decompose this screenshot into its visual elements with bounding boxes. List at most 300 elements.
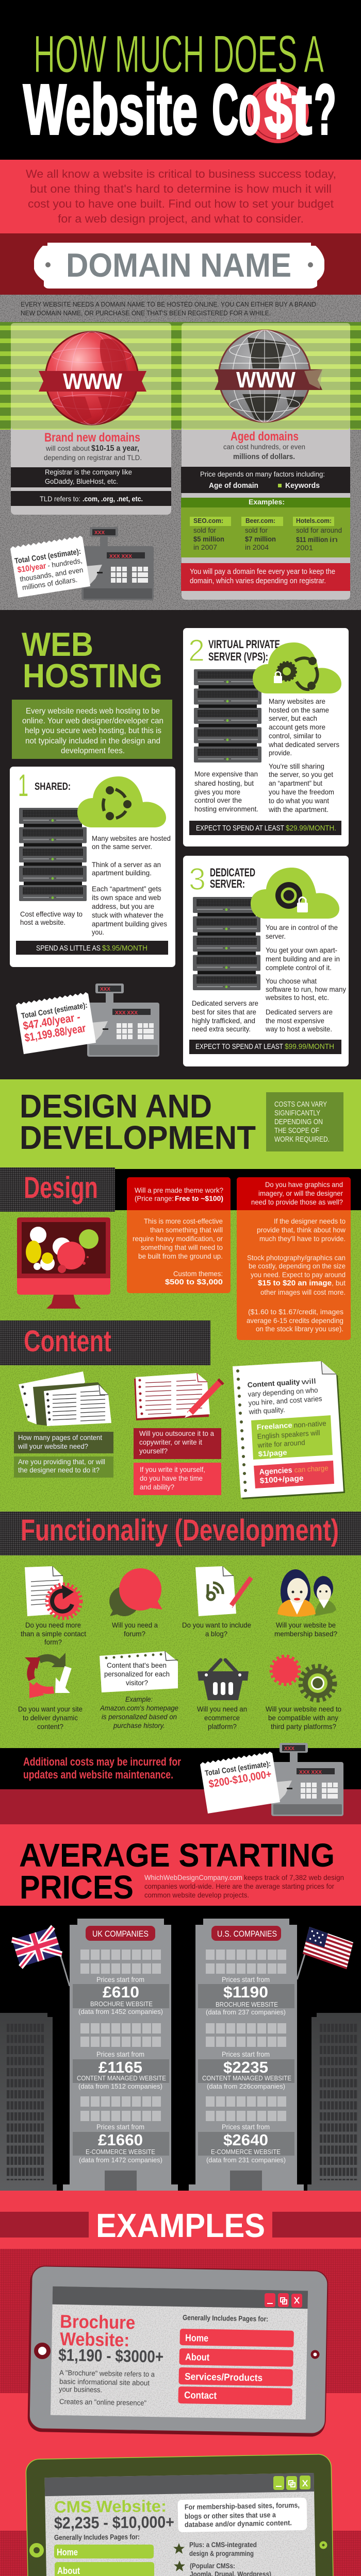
question: blog (182, 1621, 251, 1638)
dedicated description: way to host a website. (265, 1025, 332, 1033)
prices intro text: WhichWebDesignCompany.com (144, 1873, 242, 1882)
title line: website cost: $ (265, 69, 292, 148)
quality text: Content quality (247, 1378, 300, 1389)
uk price: ecommerce: E-COMMERCE WEBSITE (86, 2148, 155, 2156)
vps description: what dedicated servers (268, 740, 339, 749)
tld note (11, 491, 171, 506)
cms pages list: Home (57, 2547, 78, 2557)
panel: aged domains (181, 323, 350, 600)
us price: brochure: $1190 (223, 1983, 268, 2001)
theme answer (133, 1217, 223, 1286)
prices intro text (144, 1873, 344, 1899)
graphics answer: Stock photography/graphics can (247, 1253, 346, 1262)
example: seo.com: sold for (193, 526, 216, 534)
uk price: brochure: Prices start from (96, 1975, 144, 1984)
icon: cloud with ring (77, 776, 166, 827)
example: hotels.com: Hotels.com: (296, 517, 332, 524)
question: write yourself: and ability? (140, 1483, 174, 1491)
icon: cash register with domain total cost: XXX (94, 530, 105, 536)
icon: cash register with domain total cost (10, 527, 154, 600)
hosting intro box: not typically included in the design and (25, 737, 160, 745)
uk price: ecommerce: £1660 (98, 2131, 143, 2149)
example: beer.com: in 2004 (245, 543, 269, 551)
heading: average starting prices: PRICES (20, 1869, 134, 1906)
content subsection (0, 1320, 345, 1499)
question: write yourself (134, 1463, 221, 1495)
freelance rate: $1/page (258, 1448, 287, 1458)
graphics question (251, 1180, 343, 1206)
us price: ecommerce: Prices start from (222, 2123, 270, 2131)
freelance rate: write for around (257, 1438, 305, 1449)
question: outsource: Will you outsource it to a (139, 1429, 214, 1437)
icon: blog document and pencil (195, 1566, 251, 1616)
theme question: Will a pre made theme work? (135, 1186, 223, 1194)
example: seo.com: in 2007 (193, 543, 217, 551)
vps description: gives you more (194, 788, 240, 796)
label: uk companies: UK COMPANIES (92, 1929, 149, 1939)
question: contact form: Do you need more (25, 1621, 81, 1629)
graphics answer: you need. Expect to pay around (251, 1270, 346, 1279)
shared description: Many websites are hosted (92, 834, 171, 842)
question: who provides (14, 1456, 113, 1478)
dedicated description: You choose what (266, 977, 317, 985)
brochure description (59, 2368, 155, 2407)
examples section background (0, 2191, 361, 2576)
icon: dollar coin (247, 81, 309, 143)
theme answer: Custom themes: (173, 1269, 223, 1278)
heading: dedicated server: DEDICATED (210, 866, 255, 879)
question: ecommerce: Will you need an (197, 1705, 247, 1713)
shared description: address, but you are (92, 902, 154, 910)
freelance rate: non-native (293, 1419, 326, 1429)
domain fee note (181, 563, 350, 591)
shared price bar: $3.95/MONTH (102, 944, 147, 953)
panel: web hosting section (0, 610, 361, 1079)
receipt: domain total cost: $10/year (17, 562, 47, 574)
dedicated description: need extra security. (192, 1025, 251, 1033)
average starting prices heading (0, 1824, 361, 1906)
example: hotels.com: $11 million (296, 535, 328, 544)
heading tag: design (0, 1167, 115, 1212)
dedicated price bar: EXPECT TO SPEND AT LEAST (195, 1042, 283, 1051)
intro text (26, 167, 336, 225)
vps description: the server, so you get (269, 770, 333, 778)
question: membership (274, 1621, 337, 1638)
heading: vps: VIRTUAL PRIVATE (208, 638, 280, 651)
intro text: for a web design project, and what to consider. (58, 212, 304, 225)
heading: web hosting (22, 625, 162, 694)
receipt: hosting total cost: $47.40/year - (22, 1010, 81, 1032)
cms description: database and/or dynamic content. (185, 2518, 292, 2529)
aged cost text (223, 443, 305, 461)
heading: web hosting: WEB (22, 625, 93, 663)
icon: aged globe with www banner: WWW (236, 367, 296, 393)
title line: website cost: Website (23, 70, 198, 149)
vps description (194, 697, 339, 814)
vps price bar (189, 821, 341, 835)
intro band (0, 160, 361, 233)
brochure description: Creates an "online presence" (59, 2397, 146, 2407)
uk price: ecommerce (73, 2123, 169, 2164)
intro text: We all know a website is critical to business success today, (26, 167, 336, 180)
receipt: hosting total cost (16, 992, 96, 1054)
heading: dedicated server: SERVER: (210, 877, 245, 890)
theme answer: something that will need to (141, 1243, 223, 1251)
vps description: hosted on the same (269, 706, 329, 714)
additional costs text (23, 1755, 181, 1781)
us price: content managed: CONTENT MANAGED WEBSITE (202, 2074, 291, 2082)
icon: monitor with paint splats (17, 1217, 110, 1309)
title header (23, 25, 336, 149)
panel: domain name section (0, 295, 361, 610)
dedicated price bar: $99.99/MONTH (285, 1042, 334, 1051)
hosting intro box: Every website needs web hosting to be (26, 707, 160, 716)
graphics answer: on the stock library you use). (256, 1325, 343, 1333)
example: amazon: Amazon.com's homepage (100, 1704, 178, 1712)
question: dynamic content: content? (37, 1722, 63, 1731)
uk price: ecommerce: Prices start from (96, 2123, 144, 2131)
vps price bar: EXPECT TO SPEND AT LEAST (196, 824, 284, 833)
window buttons (265, 2293, 302, 2308)
heading: average starting prices (19, 1837, 335, 1906)
graphics answer: $15 to $20 an image (258, 1279, 332, 1287)
icon: cloud with gear and lock (253, 642, 341, 693)
note: personalized content (100, 1651, 178, 1692)
dedicated description: the most expensive (266, 1016, 324, 1025)
title line: website cost: ? (314, 70, 336, 149)
hosting intro box: help you secure web hosting, but this is (25, 726, 161, 735)
tablet: cms website (26, 2454, 334, 2576)
domain name heading band (0, 233, 361, 295)
brochure description: your business. (59, 2385, 102, 2394)
icon: red globe with www banner: WWW (63, 369, 122, 394)
freelance rate (251, 1415, 333, 1460)
brand new cost text: $10-15 a year, (91, 444, 139, 453)
heading: dedicated server (210, 866, 255, 890)
heading: domain name: DOMAIN NAME (66, 246, 291, 284)
vps description: with the apartment. (268, 805, 329, 814)
question: who provides: the designer need to do it? (18, 1466, 100, 1474)
additional costs band (0, 1743, 361, 1824)
brochure title and price (58, 2311, 163, 2366)
theme answer: $500 to $3,000 (165, 1278, 223, 1286)
graphics question: need to provide those as well? (251, 1198, 343, 1206)
uk price: brochure: BROCHURE WEBSITE (90, 2000, 153, 2008)
windows (206, 1950, 286, 2121)
vps description: to do what you want (269, 796, 329, 805)
cms title and price: CMS Website: (54, 2497, 167, 2516)
tld note: .com, .org, .net, etc. (83, 495, 143, 503)
brochure pages list: Contact (184, 2390, 217, 2401)
question: how many pages: How many pages of content (18, 1433, 102, 1442)
graphics question: Do you have graphics and (265, 1180, 343, 1189)
freelance rate: Freelance (256, 1421, 292, 1431)
heading: average starting prices: AVERAGE STARTING (19, 1837, 335, 1874)
shared description: stuck with whatever the (92, 911, 163, 919)
brochure description: A "Brochure" website refers to a (59, 2368, 155, 2378)
brand new cost text: will cost about (45, 444, 90, 452)
receipt: hosting total cost: Total Cost (estimate): (21, 1001, 88, 1021)
quality text: with quality. (248, 1405, 285, 1416)
graphics answer: be costly, depending on the size (249, 1262, 346, 1270)
us price: ecommerce (198, 2123, 294, 2164)
brochure title and price: $1,190 - $3000+ (58, 2345, 163, 2366)
examples panel: Examples: (249, 498, 285, 506)
brochure pages list: Services/Products (185, 2371, 262, 2384)
title line: website cost: t (292, 70, 312, 149)
number 1: 1 (18, 768, 28, 803)
example: beer.com (241, 517, 283, 551)
uk price: content managed: (data from 1512 companies) (78, 2082, 162, 2090)
vps description: account gets more (269, 723, 325, 731)
graphics answer: much they'll have to provide. (259, 1234, 346, 1243)
shared description (20, 834, 171, 936)
example: seo.com (190, 517, 231, 551)
shared description: you. (92, 928, 104, 936)
card: graphics and imagery (237, 1177, 351, 1340)
question: dynamic content: Do you want your site (18, 1705, 83, 1713)
uk price: content managed (73, 2050, 169, 2090)
dedicated description: You get your own apart- (266, 946, 337, 954)
receipt: domain total cost: Total Cost (estimate): (14, 547, 81, 566)
uk price: content managed: £1165 (99, 2058, 142, 2076)
example: hotels.com (293, 517, 342, 552)
note paper: content quality (233, 1361, 345, 1499)
receipt: domain total cost: thousands, and even (19, 566, 84, 583)
additional costs text: updates and website maintenance. (23, 1768, 173, 1781)
example: hotels.com: sold for around (296, 526, 342, 534)
heading: aged domains: Aged domains (231, 430, 299, 444)
intro text: cost you to have one built. Find out how to set your budget (28, 197, 334, 210)
theme answer: than something that will (150, 1226, 223, 1234)
note: personalized content: personalized for each (104, 1670, 170, 1678)
receipt: domain total cost: millions of dollars. (22, 575, 78, 591)
scope note: DEPENDING ON (274, 1118, 323, 1126)
brochure title and price: Brochure (60, 2311, 136, 2333)
tablet: brochure website (27, 2266, 328, 2437)
heading: design and development: DEVELOPMENT (20, 1119, 256, 1156)
theme question (135, 1186, 223, 1202)
cms features: Plus: a CMS-integrated (189, 2540, 257, 2549)
question: contact form: form? (44, 1638, 62, 1646)
uk price: brochure: (data from 1452 companies) (78, 2008, 163, 2015)
dedicated description: websites to host, etc. (265, 993, 329, 1002)
cms description: For membership-based sites, forums, (185, 2501, 300, 2511)
label: us companies: U.S. COMPANIES (217, 1929, 277, 1939)
price factors: Keywords (285, 481, 320, 490)
cms description: blogs or other sites that use a (185, 2511, 276, 2520)
quality text (247, 1377, 322, 1416)
cms pages list: Generally Includes Pages for: (54, 2533, 140, 2541)
us flag (297, 1927, 353, 1979)
vps description: hosting environment. (194, 805, 258, 813)
shared description: Each “apartment” gets (92, 885, 161, 893)
dedicated price bar (189, 1040, 341, 1054)
brochure description: basic informational site about (59, 2377, 150, 2387)
question: how many pages (14, 1432, 113, 1453)
question: outsource: yourself? (139, 1447, 168, 1455)
examples panel (181, 498, 350, 557)
example: amazon: Example: (125, 1695, 153, 1703)
dedicated description: ment building and are in (266, 955, 340, 963)
us price: content managed: $2235 (223, 2058, 268, 2076)
example: hotels.com: 2001 (296, 544, 313, 552)
us price: content managed (198, 2050, 294, 2090)
heading tag: design: Design (24, 1171, 98, 1205)
scope note: WORK REQUIRED. (274, 1136, 330, 1144)
us price: ecommerce: E-COMMERCE WEBSITE (211, 2148, 281, 2156)
graphics answer: If the designer needs to (274, 1217, 346, 1225)
example: amazon: purchase history. (113, 1721, 165, 1730)
icon: members (277, 1569, 336, 1617)
quality text: you hire, and cost varies (248, 1394, 322, 1407)
vps description: you have the freedom (269, 788, 334, 796)
background buildings (0, 2013, 361, 2191)
icon: speech bubbles (109, 1568, 162, 1616)
icon: document with red pen (134, 1373, 223, 1420)
prices intro text: common website develop projects. (144, 1891, 249, 1899)
prices intro text: keeps track of 7,382 web design (244, 1873, 344, 1882)
card: premade theme (127, 1177, 231, 1293)
vps description: More expensive than (194, 770, 258, 778)
us price: content managed: (data from 226companies) (207, 2082, 285, 2090)
freelance rate: English speakers will (257, 1429, 320, 1440)
dedicated description: complete control of it. (266, 963, 332, 972)
example: amazon: is personalized based on (102, 1713, 177, 1721)
icon: server rack (193, 897, 260, 990)
registrar note: Registrar is the company like (45, 468, 132, 476)
icon: shopping basket (198, 1660, 249, 1700)
question: contact form (21, 1621, 86, 1646)
question: third party: be compatible with any (268, 1714, 338, 1722)
icon: cash register with hosting total cost: XXX (100, 987, 110, 992)
question: outsource: copywriter, or write it (139, 1438, 202, 1446)
heading: web hosting: HOSTING (23, 657, 162, 694)
question: forum: Will you need a (112, 1621, 158, 1629)
price factors (181, 467, 350, 493)
hosting intro box: online. Your web designer/developer can (22, 717, 163, 725)
registrar note (11, 467, 171, 487)
question: membership: Will your website be (276, 1621, 336, 1629)
us price: brochure: BROCHURE WEBSITE (216, 2001, 278, 2008)
scope note: SIGNIFICANTLY (274, 1109, 320, 1117)
icon: red globe with www banner (39, 332, 146, 425)
question: blog: Do you want to include (182, 1621, 251, 1629)
question: who provides: Are you providing that, or will (18, 1458, 105, 1466)
brochure pages list: About (185, 2352, 210, 2363)
registrar note: GoDaddy, BlueHost, etc. (45, 477, 118, 485)
dedicated description (192, 923, 346, 1033)
shared description: Cost effective way to (20, 910, 83, 918)
brochure pages list (178, 2313, 294, 2405)
cms features (173, 2540, 305, 2576)
quality text: vary depending on who (248, 1386, 318, 1398)
panel: dedicated server (183, 856, 349, 1066)
domain intro text (21, 300, 316, 317)
question: dynamic content (18, 1705, 83, 1731)
question: how many pages: will your website need? (18, 1442, 88, 1450)
vps description: Many websites are (269, 697, 325, 705)
icon: aged globe with www banner (215, 330, 322, 422)
intro text: but one thing that's hard to determine is how much it will (30, 182, 332, 195)
hosting intro box: development fees. (61, 747, 125, 755)
hosting intro box (12, 700, 172, 759)
heading: design and development: DESIGN AND (20, 1088, 212, 1125)
title line: website cost: Co (212, 70, 261, 149)
scope note (266, 1092, 343, 1151)
domain intro text: EVERY WEBSITE NEEDS A DOMAIN NAME TO BE HOSTED ONLINE. YOU CAN EITHER BUY A BRAND (21, 300, 316, 308)
dedicated description: best for sites that are (192, 1008, 256, 1016)
graphics answer: other images will cost more. (260, 1288, 346, 1296)
brand new cost text: depending on registrar and TLD. (44, 453, 142, 462)
us price: ecommerce: (data from 231 companies) (206, 2156, 286, 2164)
receipt: domain total cost: - hundreds, (47, 556, 83, 570)
icon: cash register with hosting total cost (16, 984, 159, 1057)
shared description: apartment building gives (92, 920, 167, 928)
shared description: Think of a server as an (92, 860, 161, 869)
example: amazon (100, 1695, 178, 1730)
graphics answer (247, 1217, 346, 1333)
building: uk companies (63, 1919, 178, 2191)
us price: brochure: (data from 237 companies) (206, 2008, 286, 2016)
heading: examples: EXAMPLES (96, 2207, 265, 2244)
question: write yourself: do you have the time (140, 1474, 203, 1482)
us price: content managed: Prices start from (222, 2050, 270, 2058)
price factors: Age of domain (209, 481, 258, 490)
vps description: control over the (194, 796, 242, 804)
vps description: You're still sharing (269, 762, 324, 770)
domain fee note: You will pay a domain fee every year to keep the (190, 568, 335, 576)
note: personalized content: Content that's been (107, 1661, 167, 1669)
shared price bar (16, 941, 168, 955)
cms features: (Popular CMSs: (190, 2562, 235, 2570)
shared description: on the same server. (92, 842, 152, 851)
shared description: its own space and web (92, 893, 161, 902)
dedicated description: software to run, how many (266, 985, 346, 993)
heading: vps: SERVER (VPS): (208, 650, 268, 663)
panel: shared hosting (10, 767, 175, 967)
receipt: design total cost: Total Cost (estimate): (204, 1759, 271, 1778)
brochure pages list: Home (185, 2333, 208, 2344)
question: forum (112, 1621, 158, 1638)
cms pages list: About (57, 2566, 80, 2576)
window buttons (273, 2476, 310, 2490)
example: seo.com: $5 million (193, 535, 224, 543)
additional costs text: Additional costs may be incurred for (23, 1755, 181, 1768)
label: us companies (211, 1926, 281, 1941)
aged cost text: can cost hundreds, or even (223, 443, 305, 451)
receipt: design total cost: $200-$10,000+ (208, 1768, 272, 1790)
graphics question: imagery, or will the designer (258, 1189, 343, 1197)
icon: dynamic content arrows (25, 1653, 70, 1698)
shared description: host a website. (20, 918, 65, 926)
theme question: Free to ~$100) (175, 1194, 223, 1202)
question: third party (266, 1705, 341, 1731)
graphics answer: average 6-15 credits depending (247, 1316, 343, 1325)
question: third party: third party platforms? (271, 1722, 336, 1731)
icon: interlocking gears (271, 1656, 335, 1700)
theme answer: be built from the ground up. (138, 1252, 223, 1260)
vps description: shared hosting, but (194, 779, 254, 787)
heading: brand new domains: Brand new domains (44, 431, 140, 445)
icon: server rack (194, 669, 261, 762)
skyline chart: prices (0, 1906, 361, 2191)
cms title and price (54, 2497, 174, 2532)
note: personalized content: visitor? (126, 1679, 148, 1687)
panel: brand new domains (11, 323, 171, 515)
dedicated description: Dedicated servers are (192, 999, 258, 1007)
question: write yourself: If you write it yourself, (140, 1465, 205, 1473)
